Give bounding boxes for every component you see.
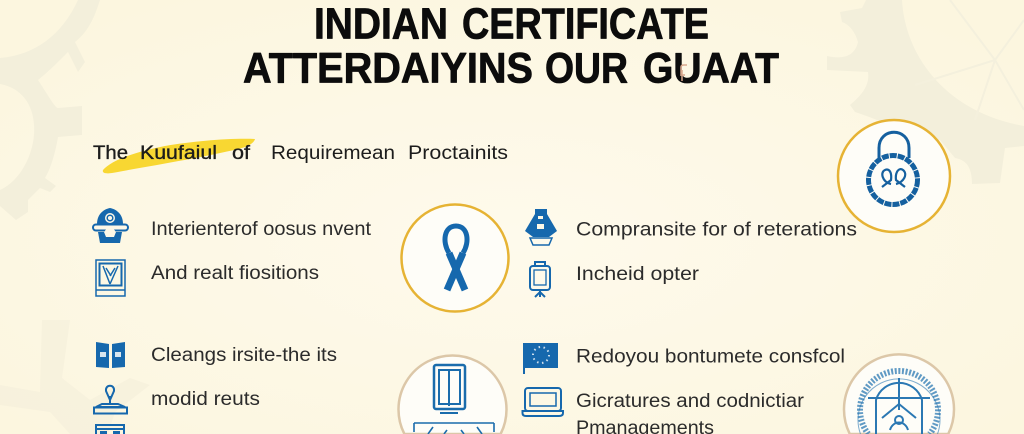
text: Gicratures and codnictiar (576, 391, 805, 412)
icon: open book (96, 342, 125, 368)
left list: item 3 (96, 342, 337, 368)
icon: flag (523, 343, 558, 374)
icon: map pin stamp (94, 386, 127, 414)
text: Incheid opter (576, 264, 700, 285)
text: Compransite for of reterations (576, 220, 857, 240)
left list: item 1 (93, 208, 372, 243)
right list: item 3 (523, 343, 845, 374)
subtitle with highlight (93, 139, 508, 173)
medallion: lock (838, 120, 950, 232)
icon: crown machine (93, 208, 128, 243)
title: CERTIFICATE (462, 0, 709, 49)
text: Interienterof oosus nvent (151, 219, 372, 240)
right list: item 1 (525, 209, 857, 245)
text: Redoyou bontumete consfcol (576, 346, 845, 368)
icon: lantern (525, 209, 557, 245)
title: ATTERDAIYINS (243, 45, 533, 93)
medallion: ribbon (402, 204, 508, 312)
title: INDIAN (314, 0, 448, 49)
left list: item 4 (94, 386, 260, 414)
icon: circular seal (858, 371, 940, 434)
right list: item 2 (530, 262, 700, 297)
title (243, 0, 779, 93)
title: GUAAT (643, 45, 779, 93)
subtitle text (93, 143, 508, 164)
medallion: window (398, 355, 506, 434)
text: Cleangs irsite-the its (151, 345, 337, 366)
yellow highlight stroke (103, 139, 255, 173)
subtitle text: of (232, 143, 251, 164)
subtitle text: Kuufaiul (140, 143, 217, 164)
icon: framed picture (96, 260, 125, 296)
subtitle text: Requiremean (271, 143, 395, 164)
left list: item 2 (96, 260, 319, 296)
text: And realt fiositions (151, 263, 319, 284)
icon: awareness ribbon (445, 226, 467, 290)
icon: device on stand (530, 262, 550, 297)
icon: laptop (522, 388, 563, 416)
icon: window with curtain rail (414, 365, 494, 434)
icon: padlock (868, 132, 918, 204)
title: OUR (545, 45, 628, 93)
subtitle text: Proctainits (408, 143, 508, 164)
medallion: emblem seal (844, 354, 954, 434)
icon: partial card (96, 425, 124, 434)
subtitle text: The (93, 143, 128, 164)
text: modid reuts (151, 389, 260, 410)
right list: item 4 (522, 388, 805, 434)
